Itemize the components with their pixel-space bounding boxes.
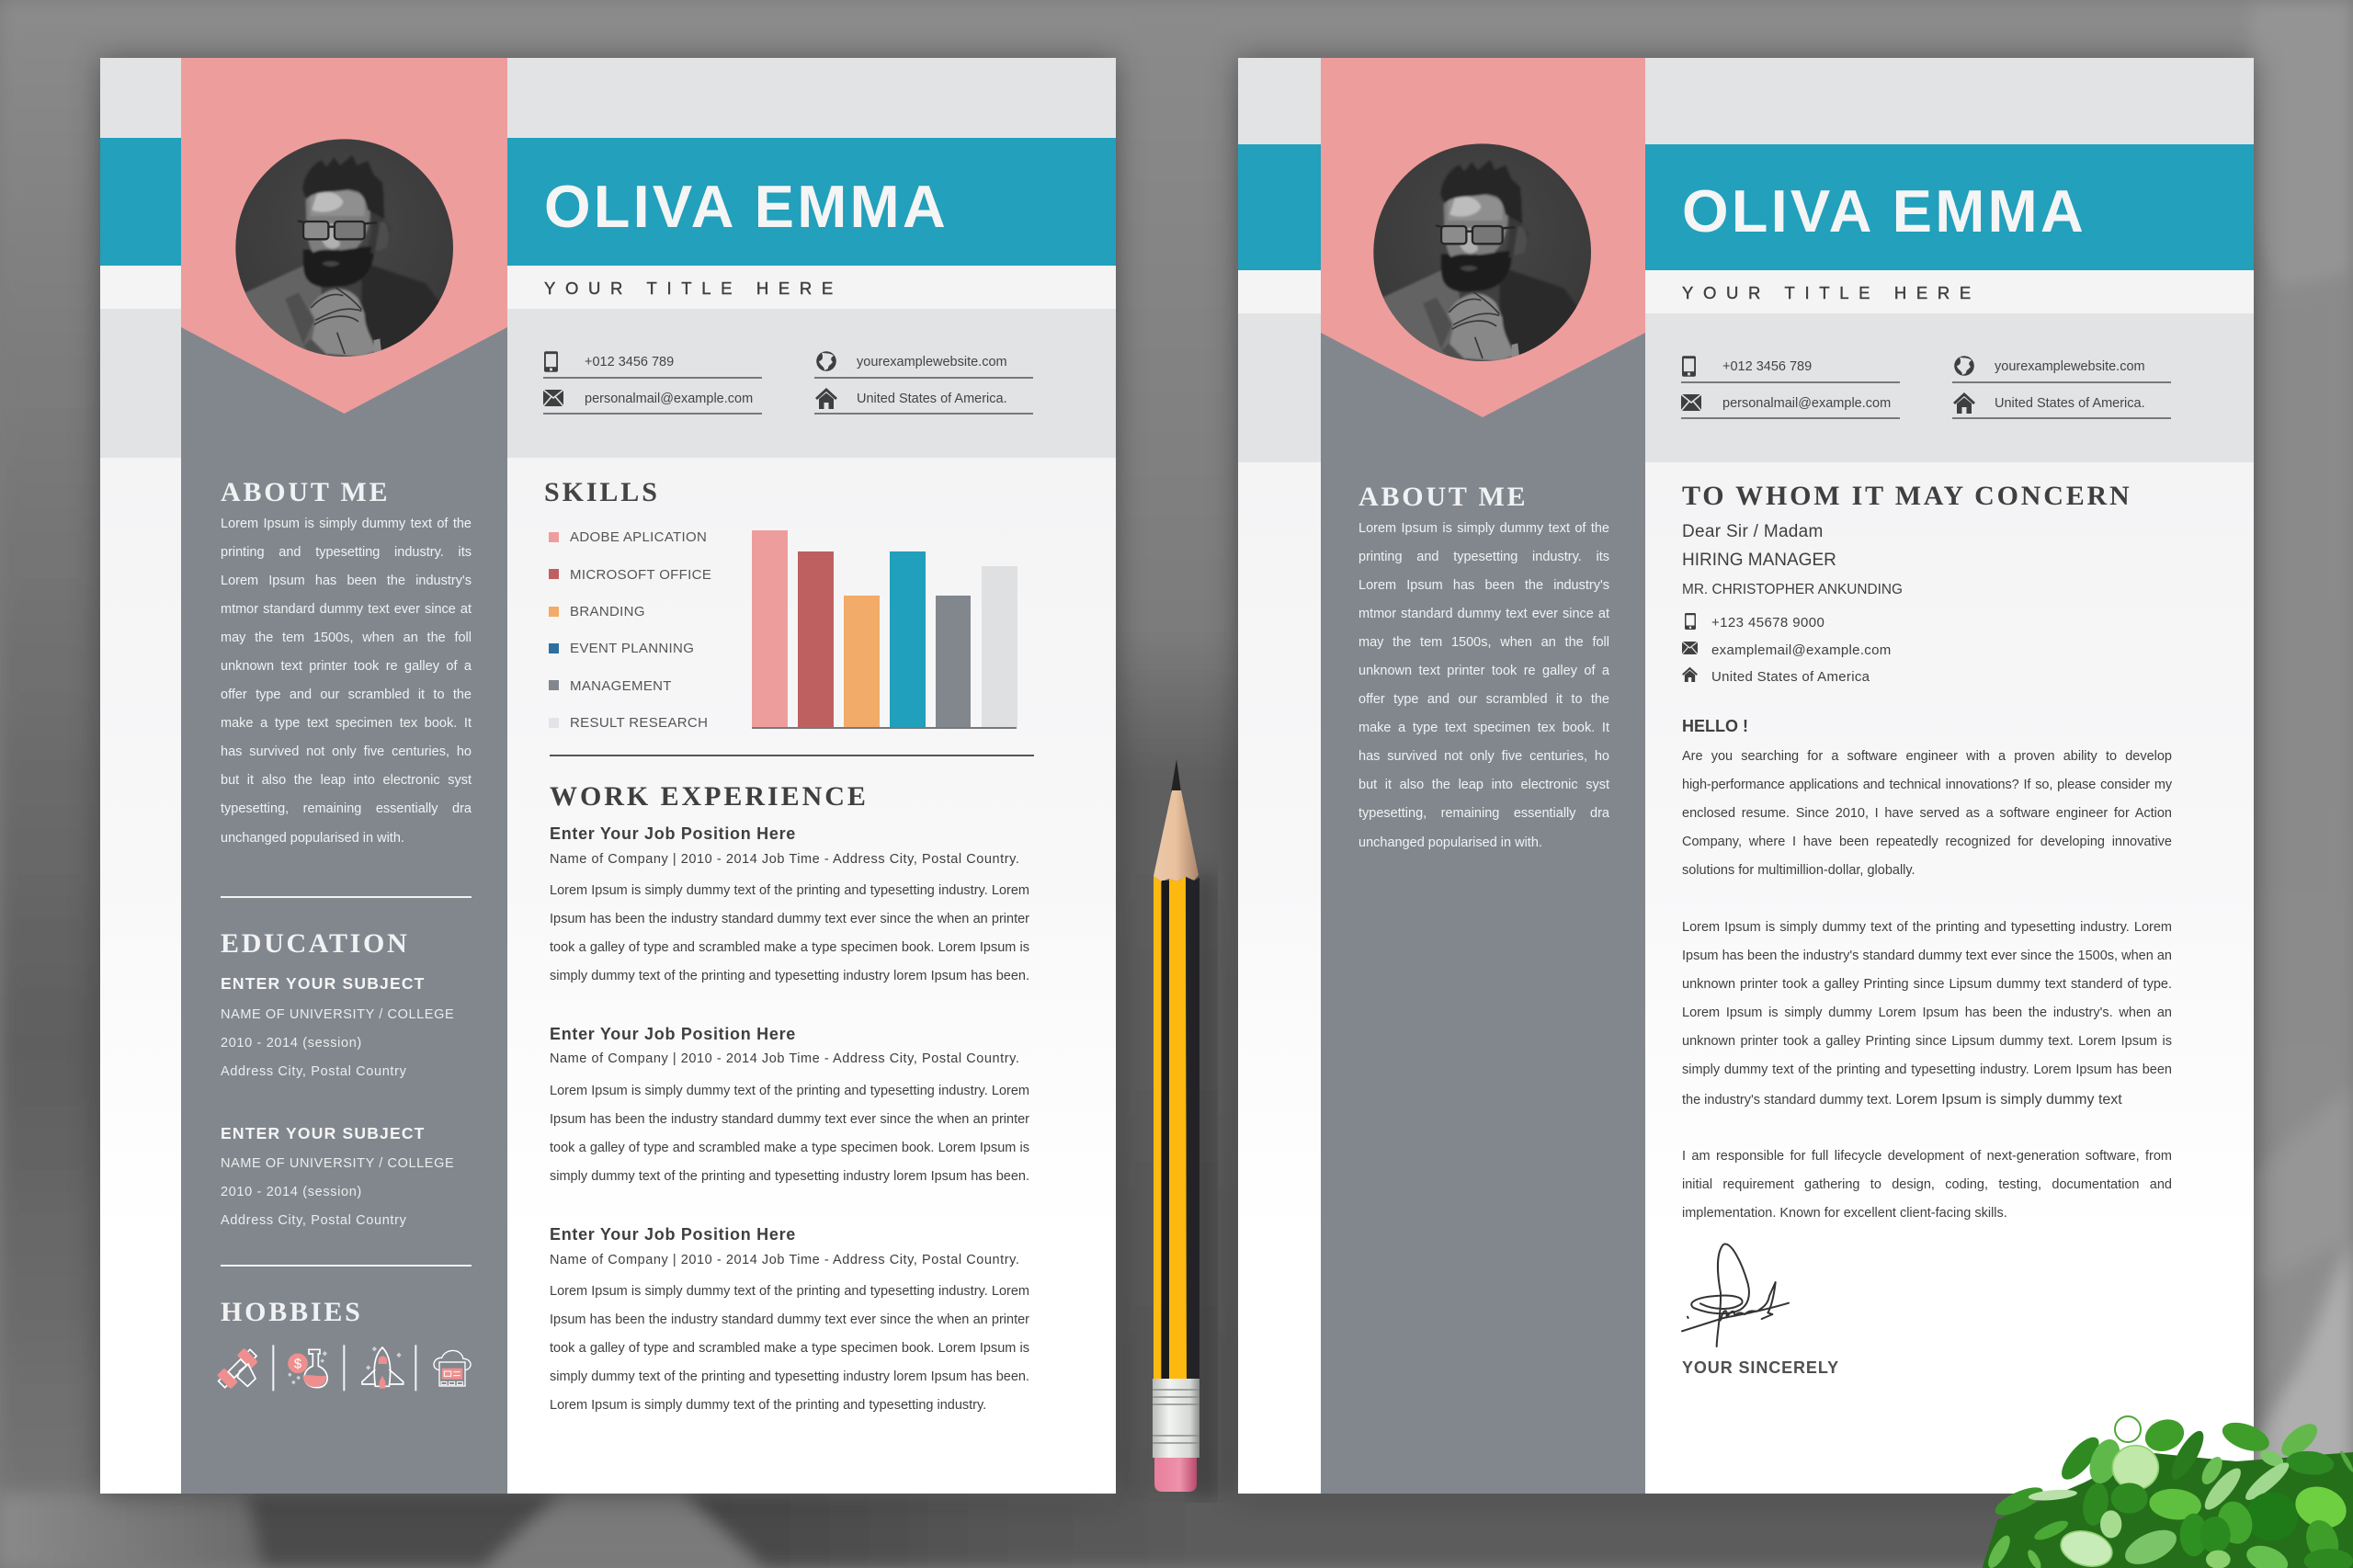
education entry 1: 2010 - 2014 (session) — [221, 1035, 362, 1050]
job entry 3 — [550, 1225, 1029, 1413]
about text: printing and typesetting industry. its — [221, 545, 472, 560]
recipient block: +123 45678 9000 — [1711, 614, 1824, 631]
job entry 2: simply dummy text of the printing and typesetting industry lorem Ipsum has been. — [550, 1169, 1029, 1184]
header band: teal name strip — [1238, 144, 2254, 270]
panel: skills — [544, 476, 1034, 756]
email: personalmail@example.com — [585, 392, 753, 406]
about text: but it also the leap into electronic syst — [1358, 778, 1609, 792]
about text: may the tem 1500s, when an the foll — [1358, 635, 1609, 650]
heading: education: EDUCATION — [221, 928, 409, 959]
education entry 2 — [221, 1124, 454, 1228]
skills legend: RESULT RESEARCH — [570, 715, 708, 731]
heading: hobbies: HOBBIES — [221, 1297, 363, 1327]
letter paragraph 3 — [1682, 1149, 2172, 1221]
icon: envelope — [1681, 394, 1701, 411]
about text: Lorem Ipsum is simply dummy text of the — [221, 517, 472, 531]
icon: home — [815, 388, 837, 409]
about text: typesetting, remaining essentially dra — [221, 801, 472, 816]
job entry 3: Enter Your Job Position Here — [550, 1225, 796, 1244]
about text: offer type and our scrambled it to the — [221, 687, 472, 702]
job title: YOUR TITLE HERE — [544, 278, 843, 298]
skills legend — [549, 529, 711, 731]
contact details — [543, 351, 1033, 415]
address: United States of America. — [857, 392, 1007, 406]
letter paragraph 1: high-performance applications and technical innovations? If so, please consider my — [1682, 778, 2172, 792]
job entry 2: Enter Your Job Position Here — [550, 1025, 796, 1043]
icon: dumbbell — [215, 1346, 260, 1392]
icon: rocket — [362, 1346, 404, 1389]
pink chevron banner — [181, 58, 507, 414]
recipient block — [1682, 522, 1903, 684]
skills legend: EVENT PLANNING — [570, 641, 694, 656]
about text: Lorem Ipsum has been the industry's — [1358, 578, 1609, 593]
job entry 3: Name of Company | 2010 - 2014 Job Time - Address City, Postal Country. — [550, 1253, 1019, 1267]
education entry 1: Address City, Postal Country — [221, 1064, 406, 1079]
email: personalmail@example.com — [1722, 396, 1891, 411]
bar chart — [752, 530, 1017, 729]
letter paragraph 1: enclosed resume. Since 2010, I have served as a software engineer for Action — [1682, 806, 2172, 821]
sidebar: hobbies — [217, 1297, 472, 1392]
job entry 1 — [550, 824, 1029, 983]
pencil tip — [1154, 759, 1199, 881]
header band: teal name strip — [100, 138, 1116, 266]
name: OLIVA EMMA — [1682, 177, 2086, 244]
portrait photo — [235, 139, 453, 357]
recipient block: Dear Sir / Madam — [1682, 522, 1824, 540]
skills legend: BRANDING — [570, 604, 645, 619]
job entry 2: Ipsum has been the industry standard dummy text ever since the when an printer — [550, 1112, 1029, 1127]
sidebar: about me — [221, 477, 472, 846]
education entry 1: NAME OF UNIVERSITY / COLLEGE — [221, 1007, 454, 1022]
divider — [343, 1345, 345, 1391]
heading: skills: SKILLS — [544, 476, 660, 507]
job entry 3: simply dummy text of the printing and typesetting industry lorem Ipsum has been. — [550, 1369, 1029, 1384]
divider — [272, 1345, 274, 1391]
job entry 3: Lorem Ipsum is simply dummy text of the printing and typesetting industry. — [550, 1398, 986, 1413]
recipient block: United States of America — [1711, 669, 1870, 684]
job title: YOUR TITLE HERE — [1682, 283, 1981, 302]
icon: envelope — [543, 390, 563, 406]
panel: work experience — [550, 781, 1029, 1413]
icon: phone — [1682, 356, 1696, 377]
divider — [415, 1345, 416, 1391]
education entry 2: Address City, Postal Country — [221, 1213, 406, 1228]
contact details — [1681, 356, 2171, 419]
education entry 1: ENTER YOUR SUBJECT — [221, 974, 426, 993]
header band: light grey top — [100, 58, 1116, 138]
sidebar: about me — [1358, 482, 1609, 850]
phone number: +012 3456 789 — [1722, 359, 1812, 374]
portrait photo — [1373, 143, 1591, 361]
panel: letter — [1681, 481, 2172, 1377]
about text: typesetting, remaining essentially dra — [1358, 806, 1609, 821]
greeting: HELLO ! — [1682, 717, 1748, 735]
letter paragraph 2: unknown printer took a galley Printing since Lipsum dummy text standerd of type. — [1682, 977, 2172, 992]
education entry 2: NAME OF UNIVERSITY / COLLEGE — [221, 1156, 454, 1171]
job entry 1: Ipsum has been the industry standard dummy text ever since the when an printer — [550, 912, 1029, 926]
address: United States of America. — [1995, 396, 2145, 411]
job entry 1: Enter Your Job Position Here — [550, 824, 796, 843]
icon: globe — [1954, 356, 1974, 376]
recipient block: examplemail@example.com — [1711, 642, 1892, 658]
pencil eraser — [1154, 1458, 1197, 1492]
about text: mtmor standard dummy text ever since at — [221, 602, 472, 617]
letter paragraph 3: initial requirement gathering to design, coding, testing, documentation and — [1682, 1177, 2172, 1192]
header band: contact strip — [1238, 313, 2254, 462]
heading: work experience: WORK EXPERIENCE — [550, 781, 869, 811]
phone number: +012 3456 789 — [585, 355, 674, 369]
job entry 2: Lorem Ipsum is simply dummy text of the printing and typesetting industry. Lorem — [550, 1083, 1029, 1097]
letter paragraph 2: simply dummy text of the printing and typesetting industry. Lorem Ipsum has been — [1682, 1062, 2172, 1077]
name: OLIVA EMMA — [544, 173, 949, 240]
icon: cloud browser — [434, 1350, 471, 1386]
hobby icons — [217, 1345, 472, 1392]
about text: make a type text specimen tex book. It — [1358, 721, 1609, 735]
icon: phone — [1685, 613, 1696, 630]
icon: globe — [816, 351, 836, 371]
page 1: resume — [100, 58, 1116, 1494]
content background gradient — [100, 458, 1116, 1494]
education entry 2: ENTER YOUR SUBJECT — [221, 1124, 426, 1142]
letter paragraph 2: Lorem Ipsum is simply dummy Lorem Ipsum has been the industry's. when an — [1682, 1006, 2172, 1020]
pencil ferrule — [1153, 1379, 1199, 1458]
education entry 2: 2010 - 2014 (session) — [221, 1184, 362, 1199]
letter paragraph 3: implementation. Known for excellent client-facing skills. — [1682, 1206, 2007, 1221]
about text: unchanged popularised in with. — [221, 831, 404, 846]
about text: unknown text printer took re galley of a — [1358, 664, 1609, 678]
job entry 3: Lorem Ipsum is simply dummy text of the printing and typesetting industry. Lorem — [550, 1283, 1029, 1298]
job entry 2: took a galley of type and scrambled make a type specimen book. Lorem Ipsum is — [550, 1141, 1029, 1155]
about text: printing and typesetting industry. its — [1358, 550, 1609, 564]
content background gradient — [1238, 462, 2254, 1494]
job entry 3: took a galley of type and scrambled make a type specimen book. Lorem Ipsum is — [550, 1341, 1029, 1356]
icon: flask and coin: $ — [294, 1358, 301, 1372]
job entry 3: Ipsum has been the industry standard dummy text ever since the when an printer — [550, 1312, 1029, 1327]
letter paragraph 2: Lorem Ipsum is simply dummy text of the printing and typesetting industry. Lorem — [1682, 920, 2172, 935]
heading: about me: ABOUT ME — [221, 477, 390, 507]
icon: home — [1953, 392, 1975, 414]
about text: Lorem Ipsum has been the industry's — [221, 574, 472, 588]
header band: contact strip — [100, 309, 1116, 458]
skills legend: MICROSOFT OFFICE — [570, 567, 711, 583]
recipient block: HIRING MANAGER — [1682, 550, 1836, 570]
education entry 1 — [221, 974, 454, 1079]
panel: grey sidebar — [1321, 320, 1645, 1494]
job entry 1: Lorem Ipsum is simply dummy text of the printing and typesetting industry. Lorem — [550, 882, 1029, 897]
job entry 1: took a galley of type and scrambled make a type specimen book. Lorem Ipsum is — [550, 940, 1029, 955]
letter paragraph 2: the industry's standard dummy text. Lorem Ipsum is simply dummy text — [1682, 1092, 2122, 1108]
sign-off: YOUR SINCERELY — [1682, 1358, 1839, 1377]
about text: unknown text printer took re galley of a — [221, 659, 472, 674]
panel: grey sidebar — [181, 315, 507, 1494]
plant leaves — [1976, 1406, 2353, 1568]
about text: make a type text specimen tex book. It — [221, 716, 472, 731]
website: yourexamplewebsite.com — [1995, 359, 2145, 374]
job entry 1: Name of Company | 2010 - 2014 Job Time - Address City, Postal Country. — [550, 852, 1019, 867]
icon: envelope — [1682, 642, 1698, 654]
page 2: cover letter — [1238, 58, 2254, 1494]
about text: Lorem Ipsum is simply dummy text of the — [1358, 520, 1609, 535]
heading: about me: ABOUT ME — [1358, 482, 1528, 512]
letter paragraph 1 — [1682, 749, 2172, 878]
about text — [1358, 520, 1609, 850]
icon: phone — [544, 351, 558, 372]
job entry 1: simply dummy text of the printing and typesetting industry lorem Ipsum has been. — [550, 969, 1029, 983]
job entry 2: Name of Company | 2010 - 2014 Job Time - Address City, Postal Country. — [550, 1051, 1019, 1066]
letter paragraph 1: Are you searching for a software engineer with a proven ability to develop — [1682, 749, 2172, 764]
heading: to whom it may concern: TO WHOM IT MAY CONCERN — [1682, 481, 2131, 511]
sidebar: education — [221, 928, 454, 1228]
about text — [221, 517, 472, 846]
about text: has survived not only five centuries, ho — [1358, 749, 1609, 764]
about text: may the tem 1500s, when an the foll — [221, 631, 472, 645]
pencil — [1153, 759, 1218, 1500]
letter paragraph 3: I am responsible for full lifecycle development of next-generation software, from — [1682, 1149, 2172, 1164]
about text: unchanged popularised in with. — [1358, 835, 1542, 850]
header band: light grey top — [1238, 58, 2254, 144]
icon: home — [1682, 667, 1698, 682]
letter paragraph 1: solutions for multimillion-dollar, globally. — [1682, 863, 1915, 878]
about text: offer type and our scrambled it to the — [1358, 692, 1609, 707]
icon: flask and coin — [288, 1349, 327, 1388]
letter paragraph 2 — [1682, 920, 2172, 1108]
signature — [1681, 1243, 1790, 1347]
header band: title strip — [100, 266, 1116, 309]
about text: but it also the leap into electronic syst — [221, 773, 472, 788]
letter paragraph 2: Ipsum has been the industry's standard dummy text ever since the 1500s, when an — [1682, 949, 2172, 963]
job entry 2 — [550, 1025, 1029, 1184]
letter paragraph 2: unknown printer took a galley Printing since Lipsum dummy text. Lorem Ipsum is — [1682, 1034, 2172, 1049]
skills legend: ADOBE APLICATION — [570, 529, 707, 545]
about text: has survived not only five centuries, ho — [221, 744, 472, 759]
about text: mtmor standard dummy text ever since at — [1358, 607, 1609, 621]
letter paragraph 1: Company, where I have been repeatedly recognized for developing innovative — [1682, 835, 2172, 849]
recipient block: MR. CHRISTOPHER ANKUNDING — [1682, 582, 1903, 597]
pencil body — [1154, 876, 1199, 1380]
skills legend: MANAGEMENT — [570, 678, 672, 694]
pink chevron banner — [1321, 58, 1645, 417]
header band: title strip — [1238, 270, 2254, 313]
website: yourexamplewebsite.com — [857, 355, 1007, 369]
